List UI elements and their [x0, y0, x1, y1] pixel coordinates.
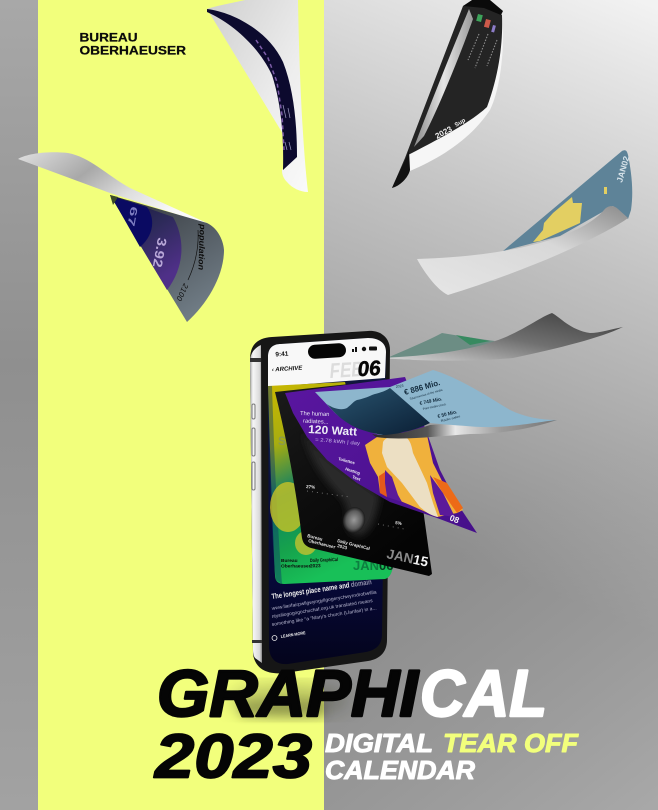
- tooth illustration: [365, 435, 463, 517]
- article text: LEARN MORE: [280, 630, 306, 639]
- orange right root: [433, 477, 463, 513]
- purple card text: The human: [300, 411, 329, 418]
- date: JAN 06: JAN06: [353, 558, 393, 573]
- label: population: population: [196, 223, 207, 270]
- label: JAN 02: JAN02: [614, 155, 631, 184]
- orange left root: [379, 472, 387, 497]
- article text: ntysiliogogogochuchaf.org.uk translated means: [271, 598, 374, 620]
- brand name: [80, 30, 186, 58]
- label: year: 2023: [434, 124, 454, 141]
- screen: [268, 338, 386, 664]
- purple card text: = 2.78 kWh | day: [315, 437, 361, 447]
- purple card text: 120 Watt: [308, 424, 358, 439]
- phone: [250, 331, 390, 673]
- calendar card: black JAN 15: Bureau: [307, 533, 323, 542]
- title: 2023: 2023: [154, 722, 312, 792]
- calendar card: black JAN 15: 27%: [306, 484, 315, 490]
- blue card figures: Print media circul.: [422, 402, 447, 411]
- dark gradient hourglass: [304, 432, 380, 535]
- brand name: BUREAU: [80, 30, 138, 44]
- article text: www.llanfairpwllgwyngyllgogerychwyrndrobwillla: [271, 589, 377, 612]
- screen header white: [268, 338, 386, 387]
- title: GRAPHICAL: CAL: [420, 656, 547, 730]
- purple card text: [300, 411, 362, 482]
- calendar card: green JAN 06: Oberhaeuser: [281, 564, 311, 570]
- subtitle: DIGITAL: [325, 728, 433, 758]
- floating sheet: top centre, on yellow: [207, 0, 308, 192]
- subtitle: [325, 728, 579, 785]
- calendar card: black JAN 15: 5%: [395, 520, 402, 526]
- calendar card: green JAN 06: 2023: [310, 563, 321, 569]
- purple card text: Heating: [345, 466, 361, 476]
- blue card figures: € 749 Mio.: [419, 396, 443, 407]
- calendar card: blue curling: [315, 370, 557, 439]
- floating sheet: grey and green: [380, 313, 623, 361]
- date: FEB 06: FEB: [329, 358, 364, 383]
- calendar card: black JAN 15: [275, 378, 432, 576]
- floating sheet: left population fan: [18, 152, 224, 322]
- label: 2100: 2100: [174, 281, 191, 303]
- label: studio: Sup: [454, 118, 467, 129]
- archive link: ‹ ARCHIVE: [272, 366, 304, 373]
- calendar card: purple: [285, 377, 477, 533]
- status bar time: 9:41: [275, 351, 289, 358]
- floating sheet: right blue and yellow: [417, 150, 632, 295]
- calendar card: black JAN 15: 2023: [337, 543, 348, 551]
- title shadow: [240, 702, 325, 716]
- purple left root: [385, 470, 402, 502]
- blue card figures: 2023: [395, 384, 404, 389]
- article text: [271, 577, 377, 640]
- purple card text: Test: [352, 474, 362, 482]
- date: JAN 15: JAN15: [385, 546, 430, 570]
- date: FEB 06: 06: [357, 357, 382, 381]
- floating sheet: top right black: [392, 0, 503, 188]
- title: GRAPHICAL: GRAPHI: [157, 656, 420, 730]
- label: 3.92: 3.92: [150, 236, 170, 269]
- calendar card: green JAN 06: Daily GraphiCal: [310, 557, 338, 564]
- purple right root: [430, 475, 455, 517]
- blue card figures: € 886 Mio.: [403, 378, 441, 397]
- purple card text: radiates...: [303, 419, 329, 426]
- title: GRAPHICAL: [157, 656, 547, 730]
- dynamic island: [308, 343, 346, 359]
- phone shadow: [230, 686, 350, 714]
- status icons: [352, 346, 377, 352]
- curl underside: [372, 420, 557, 439]
- dark blue area: [327, 388, 430, 435]
- silver frame edge: [250, 345, 262, 663]
- brand name: OBERHAEUSER: [80, 44, 186, 58]
- calendar card: green JAN 06: Bureau: [281, 558, 298, 564]
- subtitle: CALENDAR: [325, 755, 475, 785]
- subtitle: TEAR OFF: [443, 728, 579, 758]
- calendar card: black JAN 15: Oberhaeuser: [308, 538, 336, 550]
- blue card figures: [395, 378, 461, 423]
- calendar card: green JAN 06: S: [278, 434, 286, 448]
- article text: The longest place name and domain: [271, 577, 373, 601]
- blue card figures: Total revenue of the media: [409, 388, 443, 401]
- blue card figures: Radio sales: [440, 414, 461, 423]
- article text: something like "a "Mary's church (Llanfair) in a...: [271, 605, 377, 628]
- calendar card: black JAN 15: Daily GraphiCal: [337, 538, 370, 551]
- orange tooth halo: [365, 435, 463, 517]
- blue card figures: € 50 Mio.: [437, 409, 458, 420]
- yellow vertical panel: [38, 0, 324, 810]
- calendar card: green JAN 06: [268, 382, 393, 584]
- phone body: [250, 331, 390, 673]
- date: JAN 08: 08: [448, 513, 461, 525]
- cream tooth: [382, 435, 438, 517]
- purple card text: Toilettes: [338, 456, 356, 466]
- label: 67: 67: [124, 205, 139, 228]
- side buttons: [252, 404, 255, 490]
